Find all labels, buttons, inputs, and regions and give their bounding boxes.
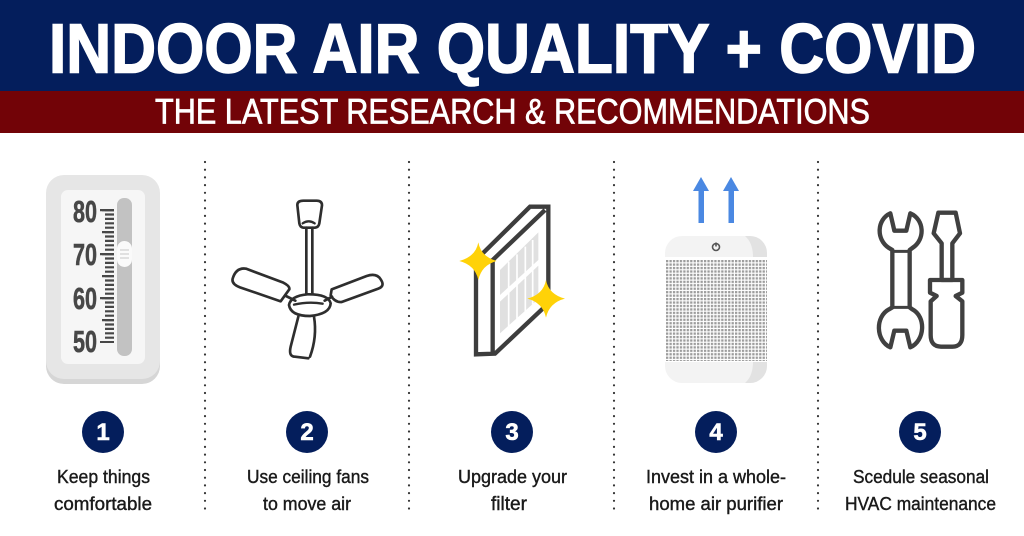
caption 3 — [458, 467, 567, 515]
icon: wrench and screwdriver — [879, 213, 962, 347]
caption 1: comfortable — [54, 494, 152, 514]
icon: thermostat: 60 — [73, 281, 97, 316]
caption 1 — [54, 467, 152, 514]
icon: thermostat: 80 — [73, 194, 97, 229]
caption 4 — [646, 467, 786, 514]
number badge 2 — [286, 411, 328, 453]
caption 3: filter — [491, 494, 528, 515]
icon: up arrows — [693, 177, 739, 223]
caption 2: to move air — [263, 494, 351, 514]
caption 4: home air purifier — [649, 494, 783, 514]
icon: thermostat — [46, 175, 160, 384]
icon: thermostat: 50 — [73, 324, 97, 359]
number badge 3: 3 — [505, 419, 519, 446]
icon: sparkle right — [527, 280, 565, 318]
caption 2 — [247, 467, 369, 514]
number badge 5 — [899, 411, 941, 453]
number badge 1 — [82, 411, 124, 453]
panel: step 3 filter — [458, 207, 567, 515]
caption 5: Scedule seasonal — [853, 467, 989, 487]
subtitle: THE LATEST RESEARCH & RECOMMENDATIONS — [155, 92, 870, 132]
number badge 3 — [491, 411, 533, 453]
caption 5: HVAC maintenance — [845, 494, 996, 514]
caption 2: Use ceiling fans — [247, 467, 369, 487]
number badge 1: 1 — [96, 419, 110, 446]
number badge 2: 2 — [300, 419, 314, 446]
caption 3: Upgrade your — [458, 467, 567, 487]
number badge 4 — [695, 411, 737, 453]
icon: sparkle left — [459, 242, 497, 280]
icon: air filter — [459, 207, 565, 354]
icon: ceiling fan — [232, 201, 383, 358]
header band: title — [0, 0, 1024, 91]
header band: subtitle — [0, 91, 1024, 133]
number badge 4: 4 — [709, 419, 723, 446]
panel: step 5 tools — [845, 213, 996, 514]
panel: step 2 ceiling fan — [232, 201, 383, 514]
icon: air purifier — [665, 236, 767, 383]
number badge 5: 5 — [913, 419, 927, 446]
caption 4: Invest in a whole- — [646, 467, 786, 487]
caption 5 — [845, 467, 996, 514]
panel: step 1 thermostat — [46, 175, 160, 514]
icon: thermostat: 70 — [73, 237, 97, 272]
panel: step 4 purifier — [646, 177, 786, 514]
caption 1: Keep things — [57, 467, 150, 487]
